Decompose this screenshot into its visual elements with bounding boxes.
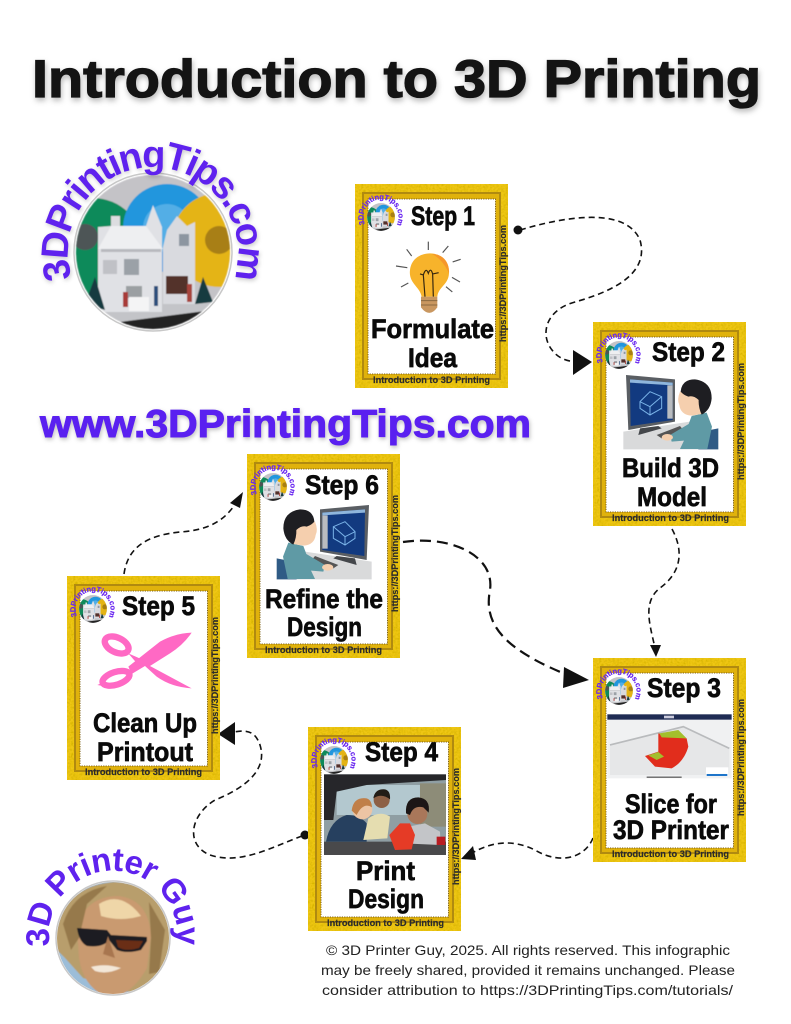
side url: https://3DPrintingTips.com xyxy=(736,699,746,816)
photo: kids with 3D print xyxy=(324,774,446,855)
arrow: step 2 to step 3 xyxy=(649,529,679,657)
copyright note: may be freely shared, provided it remains unchanged. Please xyxy=(321,962,735,978)
side url: https://3DPrintingTips.com xyxy=(736,363,746,480)
logo curved text: 3DPrintingTips.com xyxy=(40,142,262,284)
step name line 2: 3D Printer xyxy=(613,815,729,845)
step heading: Step 6 xyxy=(305,470,379,500)
step name line 2: Printout xyxy=(97,737,193,767)
title: Introduction to 3D Printing xyxy=(32,50,761,109)
mini logo: 3DPrintingTips.com xyxy=(358,194,403,226)
copyright note: © 3D Printer Guy, 2025. All rights reserved. This infographic xyxy=(326,942,730,958)
side url: https://3DPrintingTips.com xyxy=(390,495,400,612)
portrait photo xyxy=(57,882,169,994)
arrow: step 6 to step 3 xyxy=(403,541,589,688)
logo: 3D Printer Guy xyxy=(26,849,195,996)
card: step 4 xyxy=(308,727,462,931)
step name: Slice for xyxy=(625,789,717,819)
arrow: step 3 to step 4 xyxy=(461,838,593,860)
copyright note xyxy=(321,942,735,998)
logo: 3DPrintingTips.com xyxy=(40,142,262,332)
arrow: step 1 to step 2 xyxy=(514,217,642,375)
step heading: Step 2 xyxy=(652,337,725,367)
illustration: person at computer xyxy=(623,375,718,449)
step name line 2: Model xyxy=(637,482,707,512)
card: step 1 xyxy=(355,184,508,388)
footer text: Introduction to 3D Printing xyxy=(85,767,202,777)
footer text: Introduction to 3D Printing xyxy=(265,645,382,655)
step name: Clean Up xyxy=(93,708,197,738)
step name line 2: Idea xyxy=(408,343,458,373)
step name: Print xyxy=(356,856,415,886)
card: step 5 xyxy=(67,576,220,780)
step name: Refine the xyxy=(265,584,383,614)
card: step 2 xyxy=(593,322,746,526)
footer text: Introduction to 3D Printing xyxy=(327,918,444,928)
card: step 3 xyxy=(593,658,746,862)
curved text: 3D Printer Guy xyxy=(26,849,195,946)
step name: Build 3D xyxy=(622,453,719,483)
mini logo: 3DPrintingTips.com xyxy=(596,332,641,364)
step heading: Step 3 xyxy=(647,673,721,703)
footer text: Introduction to 3D Printing xyxy=(612,849,729,859)
mini logo: 3DPrintingTips.com xyxy=(596,668,641,700)
slicer screenshot xyxy=(607,714,732,778)
side url: https://3DPrintingTips.com xyxy=(210,617,220,734)
step heading: Step 4 xyxy=(365,737,438,767)
footer text: Introduction to 3D Printing xyxy=(373,375,490,385)
side url: https://3DPrintingTips.com xyxy=(451,768,461,885)
step name line 2: Design xyxy=(287,612,362,642)
logo photo xyxy=(43,172,266,332)
arrow: step 4 to step 5 xyxy=(194,722,310,858)
step name line 2: Design xyxy=(348,884,424,914)
mini logo: 3DPrintingTips.com xyxy=(250,464,295,496)
mini logo: 3DPrintingTips.com xyxy=(311,737,356,768)
illustration: person at computer xyxy=(277,505,372,579)
card: step 6 xyxy=(247,454,400,658)
website url: www.3DPrintingTips.com xyxy=(39,403,531,446)
step heading: Step 5 xyxy=(122,591,195,621)
copyright note: consider attribution to https://3DPrintingTips.com/tutorials/ xyxy=(322,982,733,998)
side url: https://3DPrintingTips.com xyxy=(498,225,508,342)
arrow: step 5 to step 6 xyxy=(124,492,243,574)
step heading: Step 1 xyxy=(411,201,475,231)
step name: Formulate xyxy=(371,314,494,344)
mini logo: 3DPrintingTips.com xyxy=(70,586,115,618)
icon: pink scissors xyxy=(97,633,192,689)
icon: light bulb xyxy=(396,242,461,313)
footer text: Introduction to 3D Printing xyxy=(612,513,729,523)
